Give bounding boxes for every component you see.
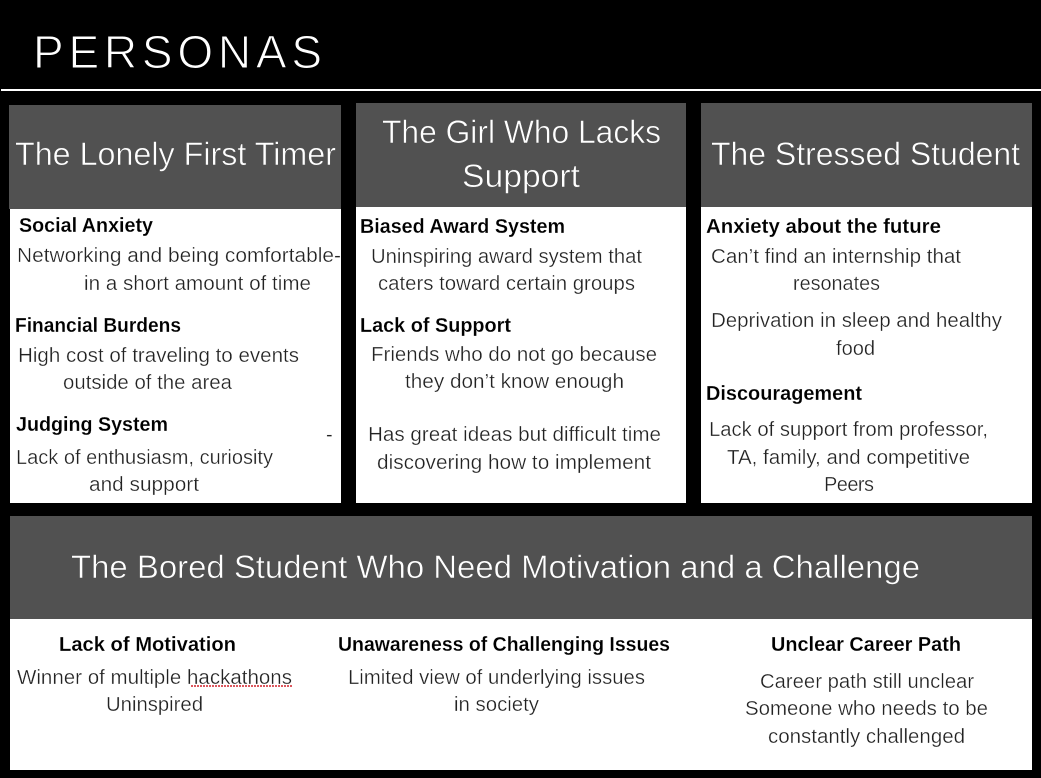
text block: Financial Burdens: outside of the area (63, 372, 233, 394)
text block: Unclear Career Path (745, 634, 988, 748)
panel: The Girl Who Lacks Support (356, 103, 686, 503)
text block: Discouragement (706, 383, 988, 496)
panel: The Bored Student (10, 516, 1032, 770)
text block: Unclear Career Path: Someone who needs to be (745, 698, 988, 720)
text block: Biased Award System: caters toward certain groups (378, 273, 635, 295)
text block: Judging System: - (326, 424, 333, 446)
text block: Unawareness of Challenging Issues: in society (454, 694, 539, 716)
text block: Discouragement: Peers (824, 474, 874, 496)
text block: Social Anxiety (17, 215, 341, 295)
text block: Lack of Support: Lack of Support (360, 315, 511, 337)
text block: Biased Award System: Uninspiring award system that (371, 246, 642, 268)
text block: Anxiety about the future: Can’t find an internship that (711, 246, 961, 268)
text block: Unawareness of Challenging Issues: Limited view of underlying issues (348, 667, 645, 689)
text block: Discouragement: Discouragement (706, 383, 862, 405)
text block: Financial Burdens: Financial Burdens (15, 315, 181, 337)
text block: Discouragement: Lack of support from professor, (709, 419, 988, 441)
heading: The Stressed Student: The Stressed Student (711, 136, 1020, 172)
text block: Biased Award System (360, 216, 642, 295)
text block: Judging System: and support (89, 474, 199, 496)
text block: Unawareness of Challenging Issues: Unawareness of Challenging Issues (338, 634, 670, 656)
text block: Anxiety about the future: resonates (793, 273, 880, 295)
text block: Social Anxiety: Social Anxiety (19, 215, 154, 237)
title: PERSONAS (33, 26, 322, 78)
text block: Anxiety about the future: food (836, 338, 875, 360)
text block: Unclear Career Path: Career path still unclear (760, 671, 974, 693)
text block: Lack of Support: Friends who do not go because (371, 344, 657, 366)
panel: The Stressed Student (701, 103, 1032, 503)
text block: Lack of Motivation: Winner of multiple hackathons (17, 667, 292, 689)
text block: Judging System: Judging System (16, 414, 168, 436)
heading: The Girl Who Lacks Support (382, 114, 661, 194)
heading: The Girl Who Lacks Support: Support (462, 158, 580, 194)
text block: Financial Burdens (15, 315, 299, 394)
text block: Social Anxiety: in a short amount of time (84, 273, 311, 295)
text block: Biased Award System: Biased Award System (360, 216, 565, 238)
text block: Financial Burdens: High cost of traveling to events (18, 345, 299, 367)
panel: The Lonely First Timer (9, 105, 341, 503)
text block: Social Anxiety: Networking and being comfortable- (17, 245, 341, 267)
text block: Lack of Support: they don’t know enough (405, 371, 624, 393)
text block: Anxiety about the future (706, 216, 1002, 360)
text block: Unclear Career Path: Unclear Career Path (771, 634, 961, 656)
text block: Unclear Career Path: constantly challenged (768, 726, 965, 748)
text block: Anxiety about the future: Deprivation in sleep and healthy (711, 310, 1002, 332)
text block: Lack of Motivation (17, 634, 292, 716)
text block: Lack of Support: Has great ideas but difficult time (368, 424, 661, 446)
text block: Anxiety about the future: Anxiety about the future (706, 216, 941, 238)
heading: The Girl Who Lacks Support: The Girl Who Lacks (382, 114, 661, 150)
text block: Lack of Motivation: Uninspired (106, 694, 203, 716)
text block: Discouragement: TA, family, and competitive (727, 447, 970, 469)
text block: Judging System: Lack of enthusiasm, curiosity (16, 447, 273, 469)
text block: Lack of Support (360, 315, 661, 474)
text block: Judging System (16, 414, 333, 496)
heading: The Lonely First Timer: The Lonely First Timer (15, 136, 336, 172)
text block: Lack of Support: discovering how to implement (377, 452, 651, 474)
text block: Lack of Motivation: Lack of Motivation (59, 634, 236, 656)
heading: The Bored Student: The Bored Student Who Need Motivation and a Challenge (71, 549, 920, 585)
text block: Unawareness of Challenging Issues (338, 634, 670, 716)
